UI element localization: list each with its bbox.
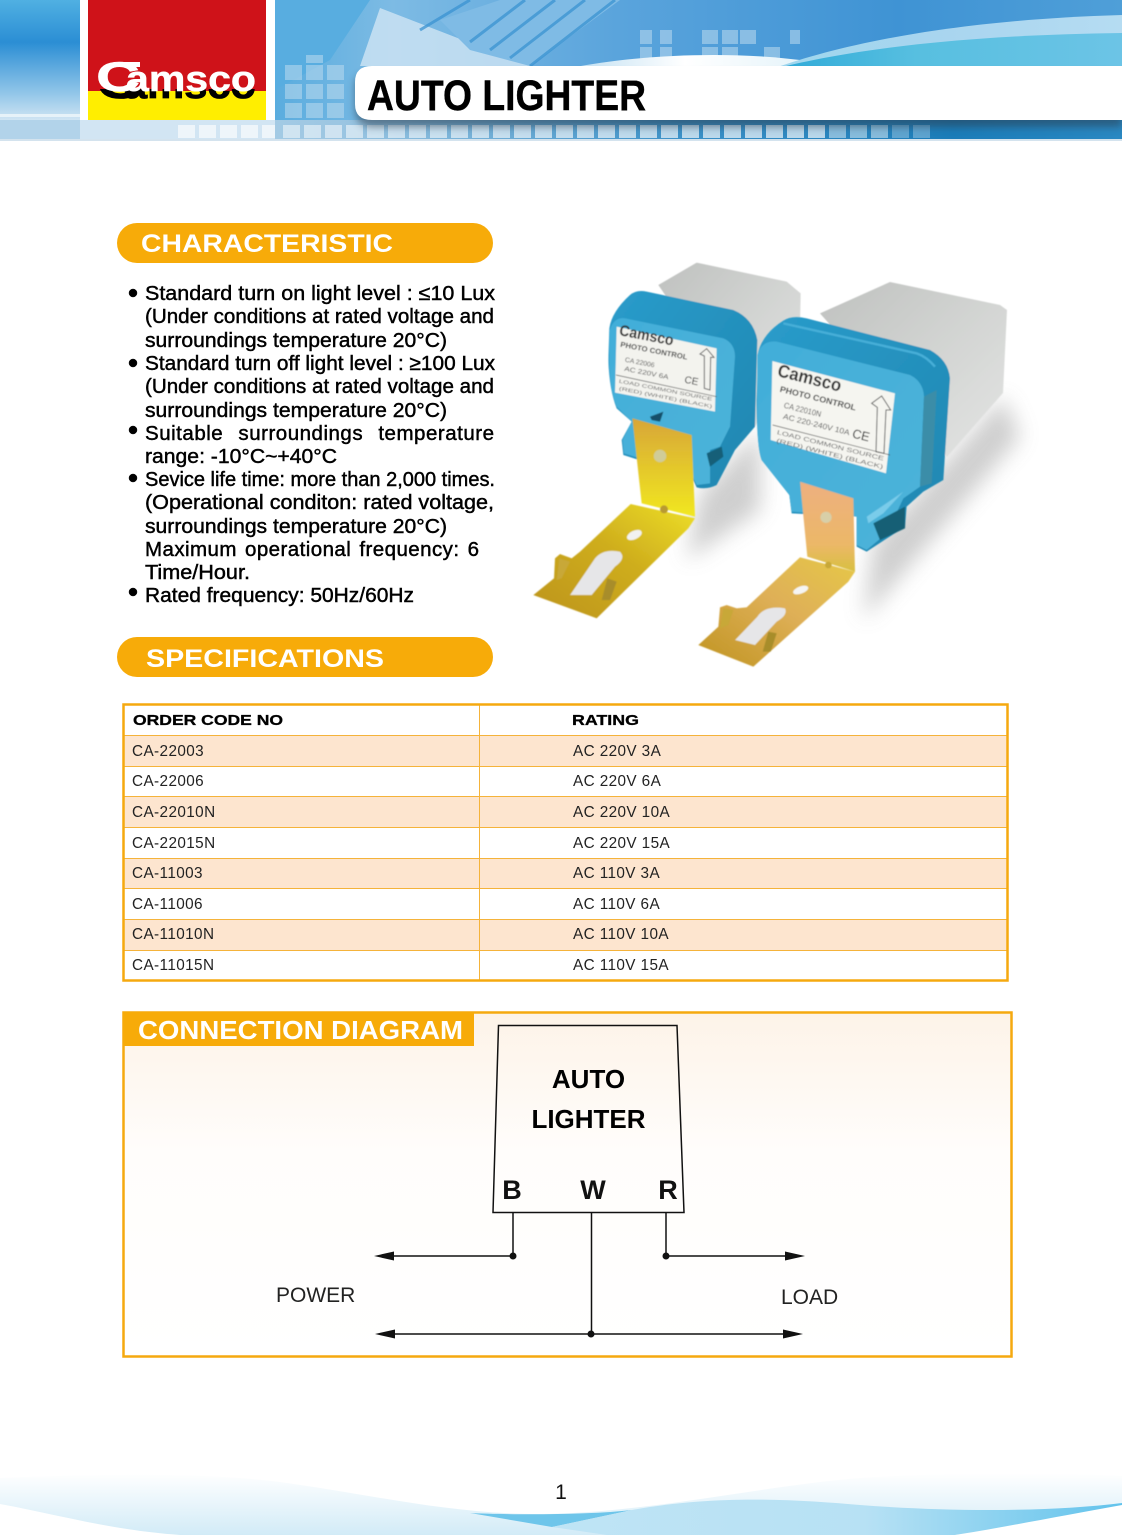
heading: characteristic	[117, 223, 493, 263]
logo block: amsco	[124, 65, 256, 107]
characteristic list: surroundings temperature 20°C)	[145, 399, 447, 422]
left device	[533, 263, 801, 618]
panel: connection diagram	[123, 1012, 1012, 1356]
table rows: CA-22010N	[132, 804, 216, 821]
auto lighter box: B	[502, 1175, 522, 1205]
logo block	[80, 0, 275, 139]
bottom strip	[275, 120, 1122, 139]
heading: specifications: SPECIFICATIONS	[146, 645, 384, 673]
heading: characteristic: CHARACTERISTIC	[141, 230, 393, 258]
heading: connection diagram: CONNECTION DIAGRAM	[138, 1015, 463, 1045]
table rows: AC 220V 10A	[573, 804, 670, 821]
right device: AC 220-240V 10A	[782, 412, 852, 437]
product photo: two photo controls	[533, 263, 1020, 667]
table rows: CA-22015N	[132, 835, 216, 852]
characteristic list: range: -10°C~+40°C	[145, 445, 337, 468]
characteristic list: Suitable surroundings temperature	[145, 422, 494, 445]
table header: RATING	[572, 713, 639, 729]
table rows: CA-11015N	[132, 957, 214, 974]
title pill	[355, 66, 1122, 127]
table rows: CA-11010N	[132, 926, 214, 943]
table header: ORDER CODE NO	[133, 713, 283, 729]
left device: CA 22006	[624, 357, 655, 369]
auto lighter box: AUTO	[552, 1064, 625, 1094]
specifications table	[123, 704, 1008, 980]
heading: specifications	[117, 637, 493, 677]
auto lighter box	[493, 1026, 684, 1212]
characteristic list: Standard turn off light level : ≥100 Lux	[145, 352, 496, 375]
table rows: AC 110V 3A	[573, 865, 660, 882]
auto lighter box: W	[580, 1175, 606, 1205]
left device: Camsco	[618, 322, 675, 349]
characteristic list: Sevice life time: more than 2,000 times.	[145, 468, 495, 491]
wiring and arrows	[374, 1212, 805, 1338]
characteristic list: (Under conditions at rated voltage and	[145, 375, 494, 398]
load label: LOAD	[781, 1286, 838, 1309]
table header	[133, 713, 639, 729]
right device: (RED) (WHITE) (BLACK)	[776, 438, 884, 471]
characteristic list: Maximum operational frequency: 6	[145, 538, 479, 561]
table rows: AC 220V 6A	[573, 773, 662, 790]
left device: PHOTO CONTROL	[620, 340, 689, 362]
logo block: C	[97, 60, 141, 107]
table rows: CA-22003	[132, 743, 204, 760]
right device: Camsco	[776, 360, 844, 396]
left device: LOAD COMMON SOURCE	[618, 379, 714, 403]
table rows: CA-11003	[132, 865, 203, 882]
table rows: AC 220V 15A	[573, 835, 670, 852]
left device: (RED) (WHITE) (BLACK)	[618, 386, 713, 410]
logo block: amsco	[126, 58, 256, 99]
left device: CE	[683, 375, 700, 388]
characteristic list: Rated frequency: 50Hz/60Hz	[145, 584, 414, 607]
grid squares	[285, 30, 800, 118]
footer waves	[0, 1473, 1122, 1535]
right device: CA 22010N	[783, 401, 822, 419]
auto lighter box: LIGHTER	[531, 1104, 646, 1134]
table rows: CA-11006	[132, 896, 203, 913]
table rows: CA-22006	[132, 773, 204, 790]
characteristic list: Time/Hour.	[145, 561, 250, 584]
header banner	[0, 0, 1122, 141]
table rows: AC 110V 6A	[573, 896, 660, 913]
table rows: AC 110V 15A	[573, 957, 669, 974]
page number: 1	[555, 1481, 567, 1504]
title pill: AUTO LIGHTER	[367, 72, 646, 120]
table rows: AC 110V 10A	[573, 926, 669, 943]
characteristic list	[129, 282, 496, 607]
left device: AC 220V 6A	[624, 366, 670, 381]
characteristic list: (Operational conditon: rated voltage,	[145, 491, 494, 514]
characteristic list: surroundings temperature 20°C)	[145, 515, 447, 538]
right device: CE	[851, 427, 871, 444]
right device: LOAD COMMON SOURCE	[776, 430, 884, 463]
logo block: C	[96, 53, 140, 100]
table rows	[132, 743, 670, 974]
soft shadows	[687, 397, 1020, 620]
right device	[698, 282, 1007, 667]
characteristic list: (Under conditions at rated voltage and	[145, 305, 494, 328]
table rows: AC 220V 3A	[573, 743, 662, 760]
power label: POWER	[276, 1284, 355, 1307]
characteristic list: Standard turn on light level : ≤10 Lux	[145, 282, 496, 305]
characteristic list: surroundings temperature 20°C)	[145, 329, 447, 352]
wave swoosh	[581, 55, 800, 66]
auto lighter box: R	[658, 1175, 678, 1205]
right device: PHOTO CONTROL	[779, 384, 857, 413]
